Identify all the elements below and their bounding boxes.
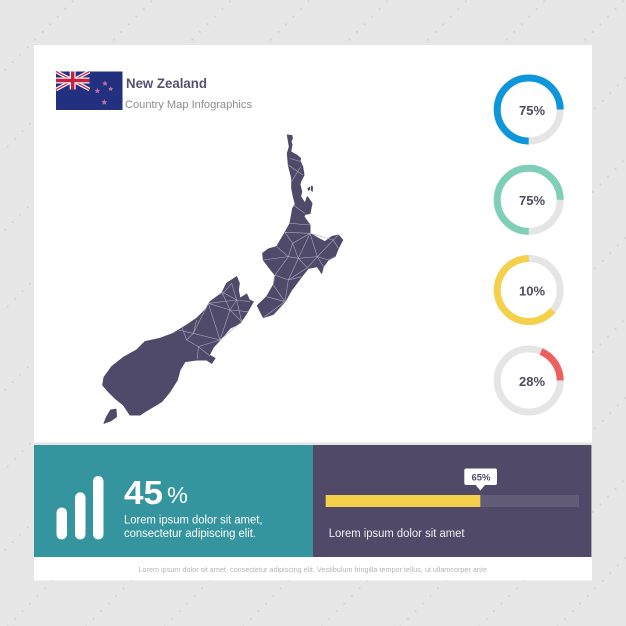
statistic: 45 percent [124, 475, 188, 512]
white card [34, 45, 592, 580]
donut chart 3: 10%: 10% [519, 283, 545, 298]
title: New Zealand [126, 75, 207, 91]
donut chart 2: 75% [497, 168, 560, 231]
statistic: 45 percent: % [167, 482, 188, 508]
map: South Island [103, 277, 253, 415]
flag of New Zealand [56, 72, 122, 110]
callout: 65%: 65% [471, 472, 491, 484]
panel: teal statistic [34, 445, 313, 557]
donut chart 4: 28%: 28% [519, 374, 545, 389]
callout: 65% [464, 468, 497, 490]
footer text: Lorem ipsum dolor sit amet, consectetur adipiscing elit. Vestibulum fringilla tempor tellus, ut ullamcorper ante [138, 565, 487, 574]
map: North Island [257, 135, 343, 318]
text block: teal panel description [124, 512, 262, 540]
donut chart 4: 28% [497, 349, 560, 412]
donut chart 3: 10% [497, 258, 560, 322]
progress bar: 65% [326, 495, 579, 507]
text block: purple panel description: Lorem ipsum dolor sit amet [329, 526, 465, 540]
donut chart 2: 75%: 75% [519, 193, 545, 208]
icon: signal bars [56, 476, 104, 540]
subtitle: Country Map Infographics [125, 99, 252, 111]
statistic: 45 percent: 45 [124, 475, 163, 512]
text block: teal panel description: Lorem ipsum dolor sit amet, [124, 512, 262, 526]
divider above panels [34, 442, 592, 445]
donut chart 1: 75%: 75% [519, 103, 545, 118]
map: New Zealand [103, 135, 343, 423]
map: Stewart Island [104, 409, 116, 423]
donut chart 1: 75% [497, 78, 560, 141]
text block: teal panel description: consectetur adipiscing elit. [124, 526, 256, 540]
panel: purple progress [313, 445, 592, 557]
